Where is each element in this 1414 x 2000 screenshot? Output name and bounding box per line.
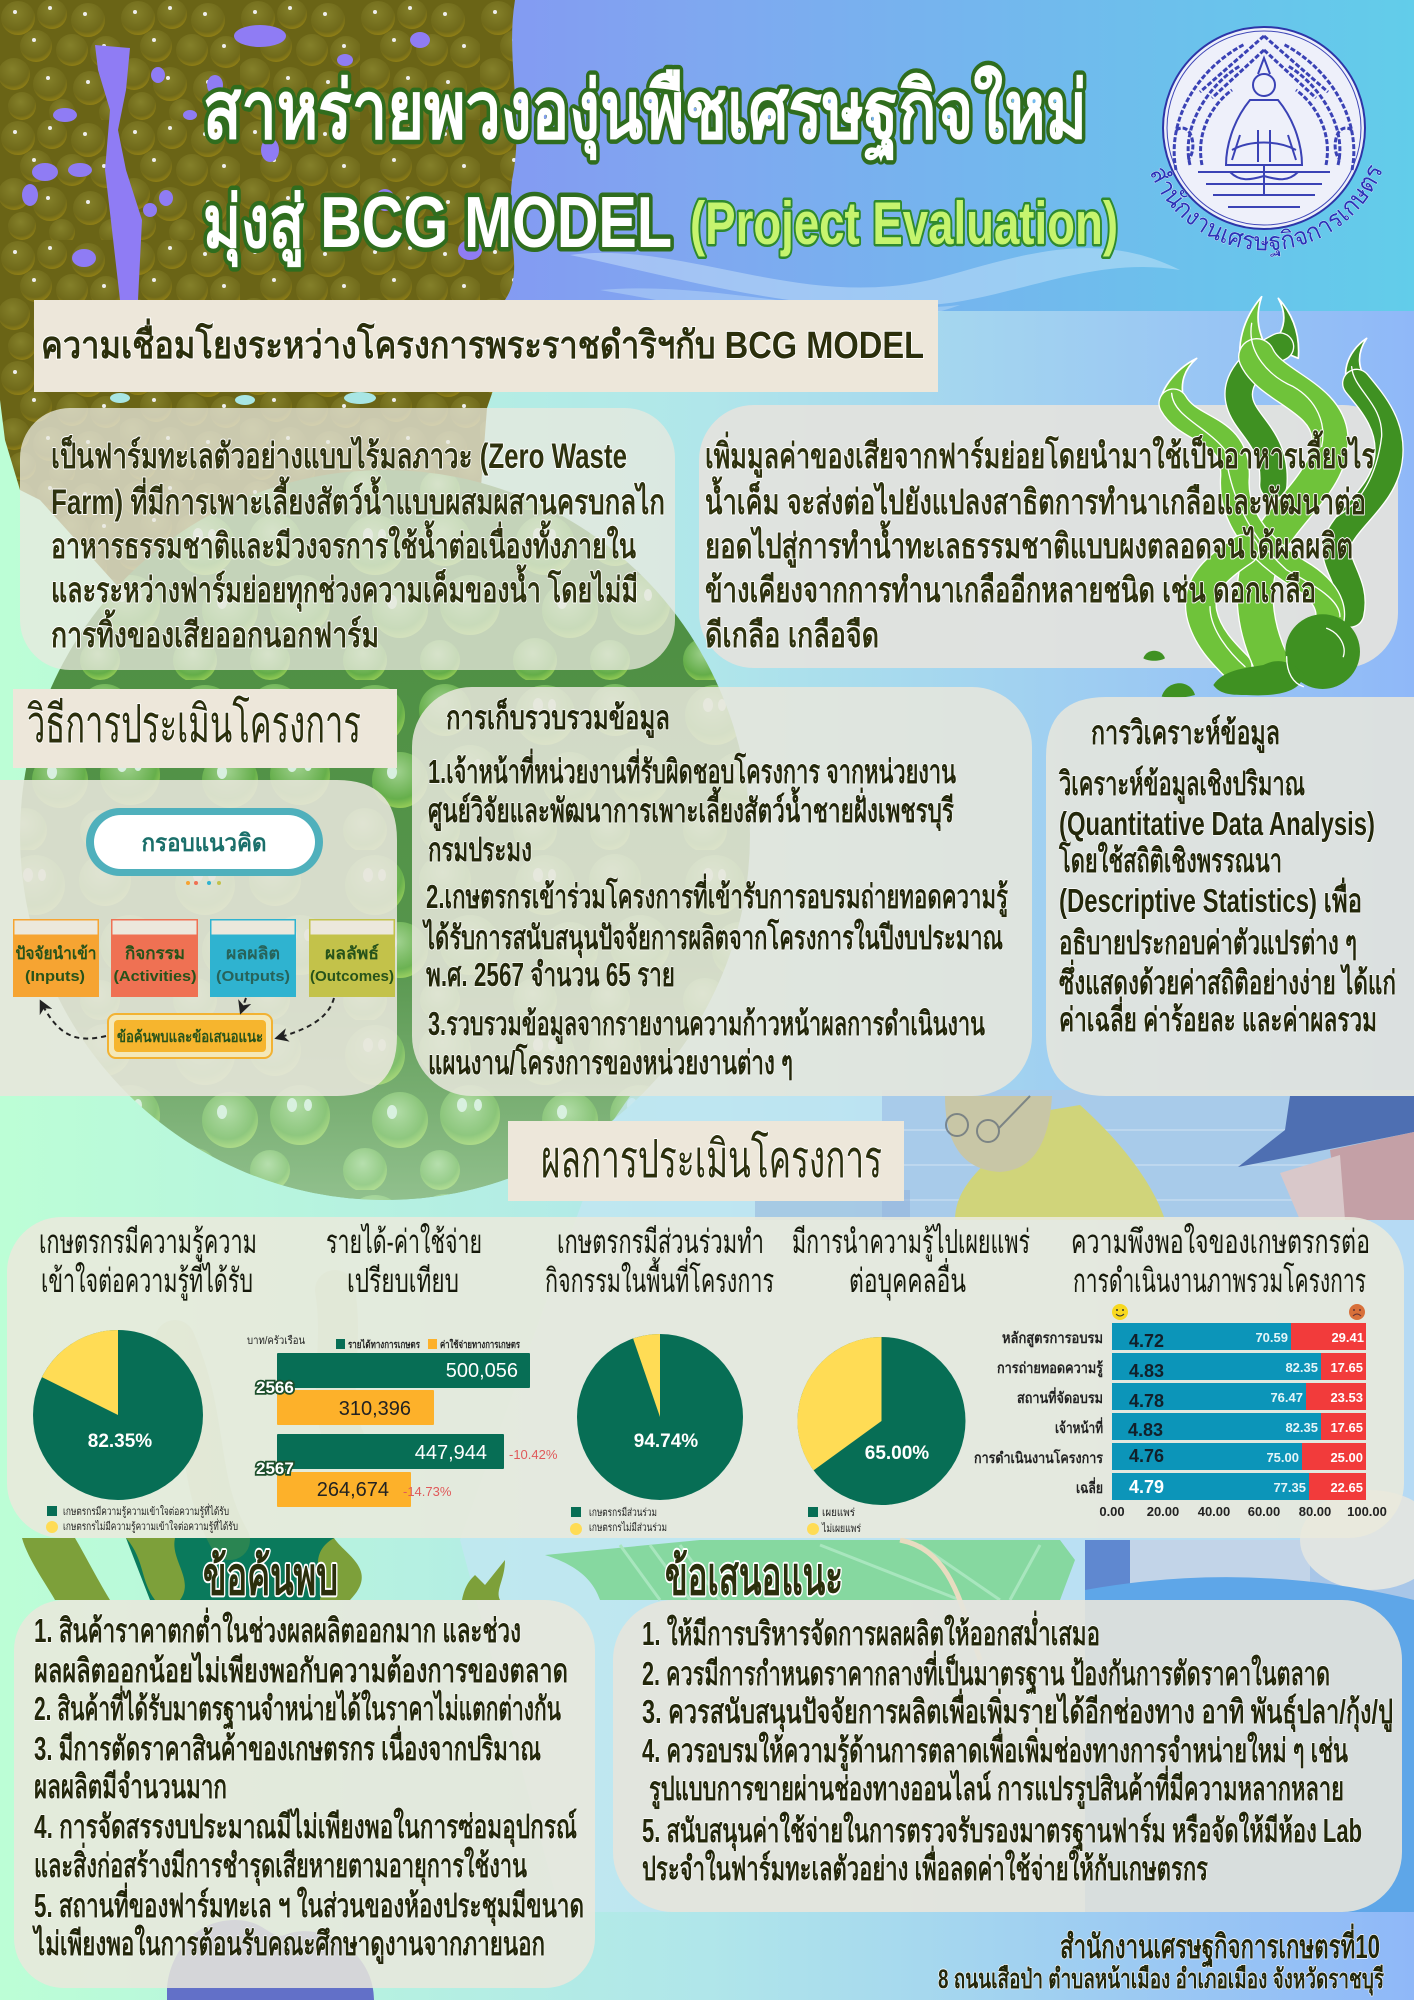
legend: เกษตรกรมีส่วนร่วม (589, 1506, 657, 1519)
pie chart: participation: 94.74% (634, 1431, 698, 1452)
box: inputs: ปัจจัยนำเข้า (16, 944, 96, 963)
legend: เกษตรกรมีความรู้ความเข้าใจต่อความรู้ที่ได้รับ (63, 1503, 229, 1518)
panel: data collection: 3.รวบรวมข้อมูลจากรายงานความก้าวหน้าผลการดำเนินงาน (428, 1005, 985, 1045)
framework title pill (86, 808, 323, 876)
box: outputs: ผลผลิต (226, 944, 280, 963)
panel: data collection: ศูนย์วิจัยและพัฒนาการเพาะเลี้ยงสัตว์น้ำชายฝั่งเพชรบุรี (428, 786, 954, 832)
box: findings and recommendations (108, 1014, 272, 1058)
panel: findings: ไม่เพียงพอในการต้อนรับคณะศึกษาดูงานจากภายนอก (32, 1924, 545, 1965)
stacked bar chart: satisfaction: สถานที่จัดอบรม (1017, 1387, 1103, 1407)
bar chart: income expense: 447,944 (415, 1442, 487, 1464)
panel: data analysis: โดยใช้สถิติเชิงพรรณนา (1058, 841, 1282, 879)
dots connector (186, 881, 221, 885)
chart titles: มีการนำความรู้ไปเผยแพร่ (792, 1223, 1030, 1262)
stacked bar chart: satisfaction: 29.41 (1331, 1330, 1364, 1345)
logo: สำนักงานเศรษฐกิจการเกษตร (1150, 164, 1382, 258)
panel: data analysis (1046, 697, 1414, 1096)
rocks (1143, 614, 1360, 698)
panel: data collection (412, 687, 1032, 1096)
bar chart: income expense (247, 1334, 558, 1507)
stacked bar chart: satisfaction: 4.78 (1129, 1391, 1164, 1411)
bar chart: income expense: 264,674 (317, 1479, 389, 1501)
legend: เผยแพร่ (822, 1507, 855, 1519)
text: zero waste farm: อาหารธรรมชาติและมีวงจรการใช้น้ำต่อเนื่องทั้งภายใน (51, 520, 636, 566)
pie chart: dissemination: 65.00% (865, 1443, 929, 1464)
stacked bar chart: satisfaction (974, 1304, 1387, 1519)
chart titles: รายได้-ค่าใช้จ่าย (326, 1223, 482, 1260)
chart titles: ต่อบุคคลอื่น (849, 1258, 966, 1301)
heading: evaluation method: วิธีการประเมินโครงการ (27, 695, 361, 754)
bar chart: income expense: บาท/ครัวเรือน (247, 1334, 305, 1347)
chart titles: เปรียบเทียบ (347, 1262, 459, 1299)
pie chart: knowledge (33, 1330, 238, 1533)
text: zero waste farm: เป็นฟาร์มทะเลตัวอย่างแบบไร้มลภาวะ (Zero Waste (51, 434, 627, 476)
framework title pill: กรอบแนวคิด (142, 830, 266, 857)
stacked bar chart: satisfaction: 20.00 (1147, 1504, 1179, 1519)
legend (807, 1507, 861, 1535)
illustration: kelp top right (1143, 297, 1389, 698)
panel: data collection: ได้รับการสนับสนุนปัจจัยการผลิตจากโครงการในปีงบประมาณ (422, 918, 1003, 959)
legend (570, 1506, 667, 1535)
light strands (1160, 297, 1330, 667)
stacked bar chart: satisfaction: 40.00 (1198, 1504, 1230, 1519)
box: activities (111, 919, 198, 997)
stacked bar chart: satisfaction: 82.35 (1285, 1420, 1318, 1435)
panel: findings: และสิ่งก่อสร้างมีการชำรุดเสียหายตามอายุการใช้งาน (34, 1842, 527, 1887)
text: zero waste farm: การทิ้งของเสียออกนอกฟาร์ม (51, 609, 379, 655)
stacked bar chart: satisfaction: 70.59 (1255, 1330, 1288, 1345)
stacked bar chart: satisfaction: 4.83 (1129, 1361, 1164, 1381)
heading: evaluation results: ผลการประเมินโครงการ (541, 1130, 882, 1189)
heading: findings: ข้อค้นพบ (203, 1548, 338, 1606)
stacked bar chart: satisfaction: 23.53 (1330, 1390, 1363, 1405)
box: outputs: (Outputs) (216, 968, 290, 985)
panel: framework (0, 780, 397, 1096)
chart titles: กิจกรรมในพื้นที่โครงการ (545, 1257, 774, 1299)
heading: evaluation results (508, 1121, 904, 1201)
legend: ค่าใช้จ่ายทางการเกษตร (440, 1338, 520, 1351)
panel: results (7, 1217, 1404, 1538)
panel: data collection: กรมประมง (428, 831, 532, 868)
decorative wave (570, 248, 1180, 323)
photo: green sea grapes circle (0, 470, 760, 1210)
panel: findings: ผลผลิตออกน้อยไม่เพียงพอกับความต้องการของตลาด (34, 1651, 568, 1689)
legend: รายได้ทางการเกษตร (348, 1338, 420, 1351)
panel: data collection: แผนงาน/โครงการของหน่วยงานต่าง ๆ (428, 1043, 793, 1081)
text: zero waste farm: และระหว่างฟาร์มย่อยทุกช่วงความเค็มของน้ำ โดยไม่มี (51, 564, 638, 612)
pie chart: knowledge: 82.35% (88, 1431, 152, 1452)
stacked bar chart: satisfaction: 80.00 (1299, 1504, 1331, 1519)
photo: sea grapes top left (0, 0, 517, 600)
box: outcomes: ผลลัพธ์ (325, 943, 379, 963)
text: value added: ดีเกลือ เกลือจืด (705, 616, 879, 655)
stacked bar chart: satisfaction: การดำเนินงานโครงการ (974, 1448, 1104, 1467)
panel: findings: 1. สินค้าราคาตกต่ำในช่วงผลผลิตออกมาก และช่วง (34, 1607, 521, 1649)
stacked bar chart: satisfaction: เฉลี่ย (1076, 1477, 1103, 1497)
arrows: framework flow (41, 998, 334, 1039)
heading: evaluation method (13, 689, 397, 768)
stacked bar chart: satisfaction: 4.72 (1129, 1331, 1164, 1351)
legend: เกษตรกรไม่มีส่วนร่วม (589, 1521, 667, 1534)
panel: data collection: พ.ศ. 2567 จำนวน 65 ราย (426, 956, 675, 993)
panel: zero waste farm (20, 408, 675, 670)
box: outcomes (309, 919, 395, 997)
stacked bar chart: satisfaction: 0.00 (1099, 1504, 1125, 1519)
text: zero waste farm (51, 434, 665, 655)
panel: data analysis: การวิเคราะห์ข้อมูล (1091, 714, 1280, 754)
bar chart: income expense: -14.73% (403, 1484, 452, 1499)
stacked bar chart: satisfaction: 76.47 (1270, 1390, 1303, 1405)
box: activities: (Activities) (114, 968, 197, 985)
stacked bar chart: satisfaction: หลักสูตรการอบรม (1002, 1330, 1103, 1348)
title: (Project Evaluation) (690, 190, 1118, 257)
panel: recommendations (613, 1600, 1402, 1912)
panel: recommendations: 1. ให้มีการบริหารจัดการผลผลิตให้ออกสม่ำเสมอ (642, 1610, 1100, 1652)
stacked bar chart: satisfaction: 22.65 (1330, 1480, 1363, 1495)
panel: findings: 5. สถานที่ของฟาร์มทะเล ฯ ในส่วนของห้องประชุมมีขนาด (34, 1882, 584, 1927)
box: activities: กิจกรรม (125, 944, 185, 963)
box: findings and recommendations: ข้อค้นพบและข้อเสนอแนะ (117, 1028, 263, 1046)
panel: data collection: 2.เกษตรกรเข้าร่วมโครงการที่เข้ารับการอบรมถ่ายทอดความรู้ (426, 873, 1008, 918)
pie chart: participation (570, 1334, 743, 1535)
chart titles: เกษตรกรมีความรู้ความ (39, 1223, 257, 1262)
panel: findings: ผลผลิตมีจำนวนมาก (34, 1768, 227, 1805)
bar chart: income expense: -10.42% (509, 1447, 558, 1462)
white veins (1172, 323, 1382, 667)
photo: farm workers background (460, 1090, 1414, 1912)
title: สาหร่ายพวงองุ่นพืชเศรษฐกิจใหม่ (203, 64, 1087, 163)
stacked bar chart: satisfaction: 60.00 (1248, 1504, 1280, 1519)
box: inputs (13, 919, 99, 997)
stacked bar chart: satisfaction: 77.35 (1273, 1480, 1306, 1495)
panel: findings: 2. สินค้าที่ได้รับมาตรฐานจำหน่ายได้ในราคาไม่แตกต่างกัน (34, 1685, 561, 1730)
bar chart: income expense: 2566 (256, 1378, 294, 1397)
box: outputs (210, 919, 296, 997)
stacked bar chart: satisfaction: 4.83 (1128, 1420, 1163, 1440)
icon: smile (1112, 1304, 1128, 1320)
title (203, 64, 1118, 268)
panel: findings: 4. การจัดสรรงบประมาณมีไม่เพียงพอในการซ่อมอุปกรณ์ (34, 1807, 577, 1848)
stacked bar chart: satisfaction: การถ่ายทอดความรู้ (997, 1360, 1104, 1378)
dark strands (1239, 298, 1389, 613)
chart titles: เข้าใจต่อความรู้ที่ได้รับ (41, 1258, 253, 1301)
legend: ไม่เผยแพร่ (821, 1522, 861, 1535)
panel: findings (14, 1600, 595, 1988)
chart titles (39, 1223, 1370, 1301)
panel: findings: 3. มีการตัดราคาสินค้าของเกษตรกร เนื่องจากปริมาณ (34, 1725, 541, 1767)
heading: recommendations: ข้อเสนอแนะ (665, 1548, 843, 1606)
heading: BCG link (34, 300, 938, 392)
panel: value added (699, 405, 1398, 668)
bar chart: income expense: 500,056 (446, 1360, 518, 1382)
panel: data collection: 1.เจ้าหน้าที่หน่วยงานที่รับผิดชอบโครงการ จากหน่วยงาน (428, 748, 956, 790)
legend: เกษตรกรไม่มีความรู้ความเข้าใจต่อความรู้ที่ได้รับ (63, 1518, 238, 1533)
bar chart: income expense: 2567 (256, 1459, 294, 1478)
stacked bar chart: satisfaction: 100.00 (1347, 1504, 1387, 1519)
stacked bar chart: satisfaction: 75.00 (1266, 1450, 1299, 1465)
heading: BCG link: ความเชื่อมโยงระหว่างโครงการพระราชดำริฯกับ BCG MODEL (41, 318, 924, 367)
stacked bar chart: satisfaction: 25.00 (1330, 1450, 1363, 1465)
stacked bar chart: satisfaction: 82.35 (1285, 1360, 1318, 1375)
stacked bar chart: satisfaction: 4.79 (1129, 1477, 1164, 1497)
bar chart: income expense: 310,396 (339, 1398, 411, 1420)
illustration: kelp bottom left (22, 1290, 505, 2000)
box: outcomes: (Outcomes) (310, 968, 394, 985)
stacked bar chart: satisfaction: 4.76 (1129, 1446, 1164, 1466)
stacked bar chart: satisfaction: เจ้าหน้าที่ (1055, 1417, 1103, 1437)
text: value added (705, 430, 1375, 655)
chart titles: เกษตรกรมีส่วนร่วมทำ (557, 1223, 764, 1260)
logo (1150, 26, 1382, 258)
stacked bar chart: satisfaction: 17.65 (1330, 1420, 1363, 1435)
box: inputs: (Inputs) (25, 968, 85, 985)
title: มุ่งสู่ BCG MODEL (203, 183, 672, 268)
text: zero waste farm: Farm) ที่มีการเพาะเลี้ยงสัตว์น้ำแบบผสมผสานครบกลไก (51, 476, 665, 522)
panel: data collection: การเก็บรวบรวมข้อมูล (446, 697, 670, 739)
legend (336, 1338, 520, 1351)
footer (938, 1923, 1384, 1996)
pie chart: dissemination (797, 1337, 966, 1535)
stacked bar chart: satisfaction: 17.65 (1330, 1360, 1363, 1375)
icon: sad (1349, 1304, 1365, 1320)
legend (46, 1503, 238, 1533)
